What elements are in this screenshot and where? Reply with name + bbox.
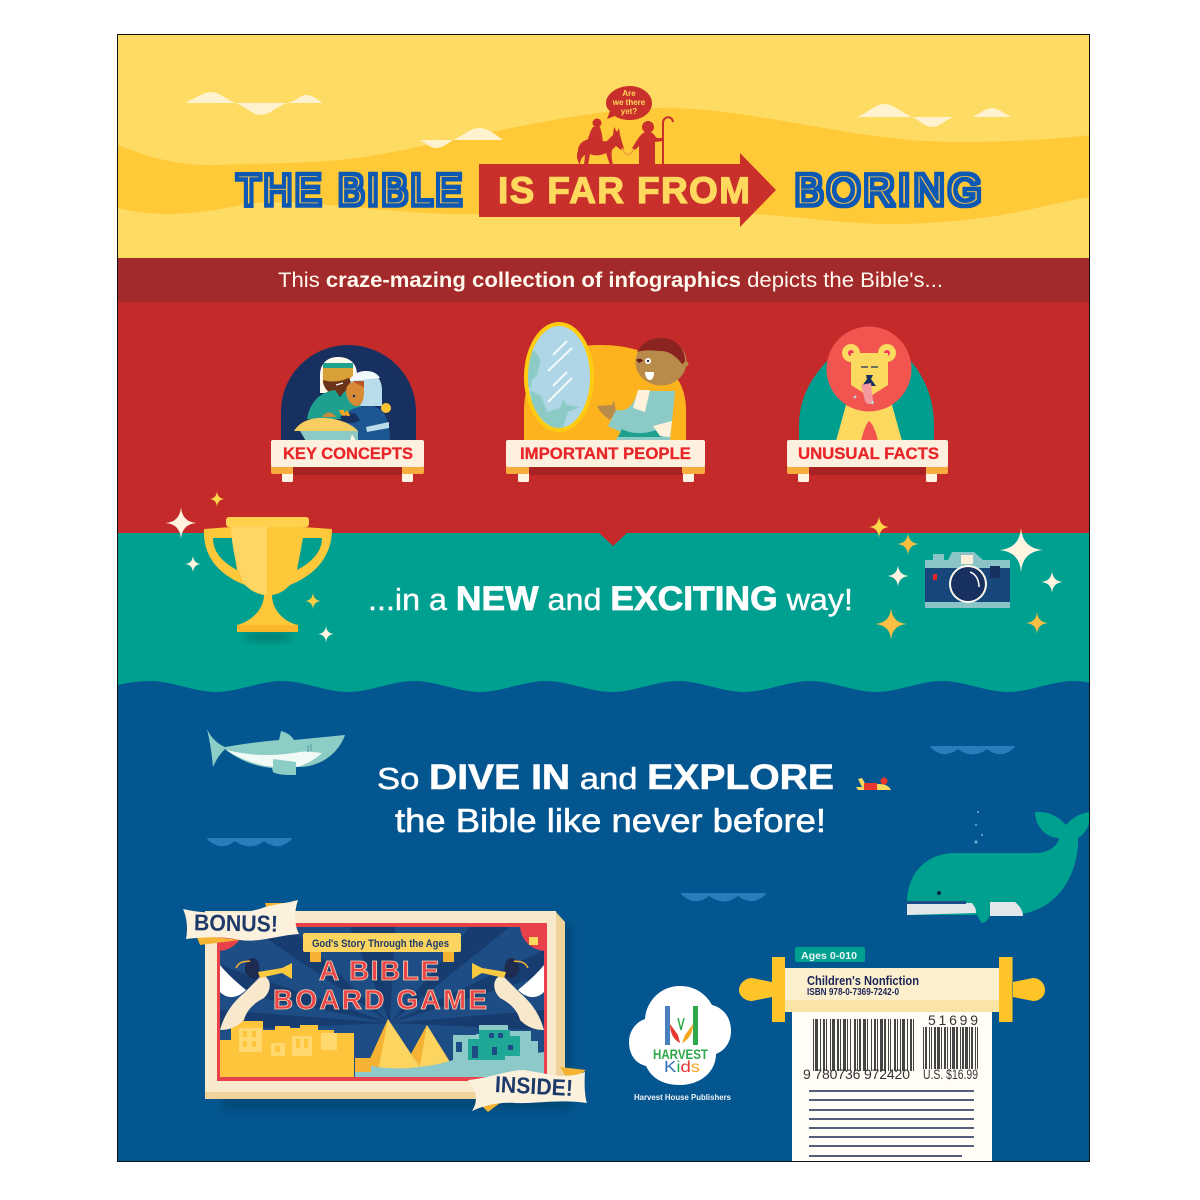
card: unusual facts <box>787 326 948 482</box>
speech bubble: we there <box>612 98 646 107</box>
ribbon: BONUS: BONUS! <box>194 909 278 937</box>
panel: yellow desert header <box>118 35 1090 259</box>
blank ruled lines <box>809 1091 974 1156</box>
arrow banner: IS FAR FROM: IS FAR FROM <box>498 170 750 211</box>
category text: ISBN 978-0-7369-7242-0 <box>807 987 899 998</box>
waves centre <box>681 893 766 902</box>
panel: blue ocean section <box>118 681 1090 1161</box>
logo: Harvest Kids: HARVEST <box>653 1046 708 1062</box>
arch: teal <box>799 358 934 441</box>
ribbon: INSIDE <box>468 1067 587 1112</box>
yellow banner: God's Story <box>303 933 461 962</box>
publisher name: Harvest House Publishers <box>634 1093 732 1102</box>
cloud left <box>185 92 322 115</box>
sparkles around trophy <box>166 491 334 642</box>
title: A BIBLE BOARD GAME <box>273 955 487 1015</box>
icon: donkey, rider and shepherd silhouette <box>577 117 673 165</box>
cloud middle <box>420 128 503 148</box>
barcode main <box>813 1019 915 1071</box>
icon: lion <box>826 326 912 441</box>
icon: trophy <box>204 517 332 641</box>
game board art <box>192 899 572 1105</box>
heading: THE BIBLE: THE BIBLE <box>237 166 465 214</box>
cloud far right <box>972 108 1012 117</box>
angel right <box>472 958 544 1030</box>
card: key concepts <box>271 345 424 482</box>
ribbon: INSIDE: INSIDE! <box>494 1071 574 1101</box>
plaque: UNUSUAL FACTS <box>787 440 948 482</box>
logo: Harvest Kids <box>629 986 731 1085</box>
barcode add-on <box>923 1027 978 1069</box>
cover border <box>118 34 1090 1162</box>
card: important people <box>506 322 705 482</box>
ribbon: BONUS <box>183 900 299 945</box>
logo: Harvest Kids: Kids <box>664 1059 700 1076</box>
plaque: IMPORTANT PEOPLE <box>506 440 705 482</box>
pyramids and water <box>355 1019 545 1077</box>
plaque: UNUSUAL FACTS: UNUSUAL FACTS <box>798 444 939 463</box>
heading: BORING: BORING <box>795 166 985 214</box>
cloud right <box>857 104 953 127</box>
barcode digits: 51699 <box>928 1012 978 1028</box>
panel: teal section <box>118 533 1090 698</box>
band: dark red intro <box>118 258 1090 302</box>
plaque: KEY CONCEPTS: KEY CONCEPTS <box>283 444 413 463</box>
sun rays <box>220 927 544 1030</box>
scroll handles <box>739 957 1045 1022</box>
icon: camera <box>925 552 1010 608</box>
age badge: Ages 0-010 <box>801 950 857 962</box>
barcode digits: U.S. $16.99 <box>923 1066 978 1082</box>
yellow city <box>220 1021 371 1077</box>
title: A BIBLE BOARD GAME: A BIBLE <box>319 955 439 986</box>
category text: Children's Nonfiction <box>807 973 919 988</box>
barcode digits <box>803 1012 978 1082</box>
speech bubble <box>606 86 652 120</box>
title: A BIBLE BOARD GAME: BOARD GAME <box>273 984 487 1015</box>
icon: shark <box>207 729 345 775</box>
book cover <box>118 35 1090 1161</box>
icon: mirror <box>524 322 594 432</box>
text: new and exciting: ...in a NEW and EXCITING way! <box>368 580 853 618</box>
yellow banner: God's Story: God's Story Through the Ages <box>312 938 449 950</box>
hill band <box>118 108 1090 224</box>
band: dark red intro: This craze-mazing collection of infographics depicts the Bible's... <box>278 269 943 292</box>
panel: red concepts section <box>118 302 1090 534</box>
barcode digits: 9 780736 972420 <box>803 1066 910 1082</box>
icon: swimmer <box>856 778 891 790</box>
cloud shape <box>629 986 731 1085</box>
sparkles around camera <box>869 516 1063 640</box>
plaque: KEY CONCEPTS <box>271 440 424 482</box>
text: dive in and explore: the Bible like never before! <box>395 802 826 839</box>
teal city <box>453 1025 538 1067</box>
box frame <box>205 911 565 1099</box>
paper <box>792 1010 992 1161</box>
category text <box>807 973 919 998</box>
scroll band <box>785 968 999 1012</box>
angel left <box>220 958 292 1030</box>
plaque: IMPORTANT PEOPLE: IMPORTANT PEOPLE <box>520 444 691 463</box>
speech bubble: Are <box>622 89 636 98</box>
icon: Mary and Joseph at the manger <box>294 357 391 441</box>
icon: whale <box>907 811 1090 923</box>
waves left <box>207 838 292 846</box>
arch: navy <box>281 345 416 441</box>
speech bubble: yet? <box>621 107 637 116</box>
board game box <box>183 899 587 1112</box>
waves top right <box>930 746 1015 754</box>
icon: smiling boy <box>597 338 688 441</box>
text: dive in and explore: So DIVE IN and EXPLORE <box>377 758 834 797</box>
arrow banner: IS FAR FROM <box>479 153 776 227</box>
arch: orange <box>524 345 686 441</box>
scroll with barcode <box>739 947 1045 1161</box>
text: dive in and explore <box>378 764 833 832</box>
age badge <box>795 947 865 962</box>
